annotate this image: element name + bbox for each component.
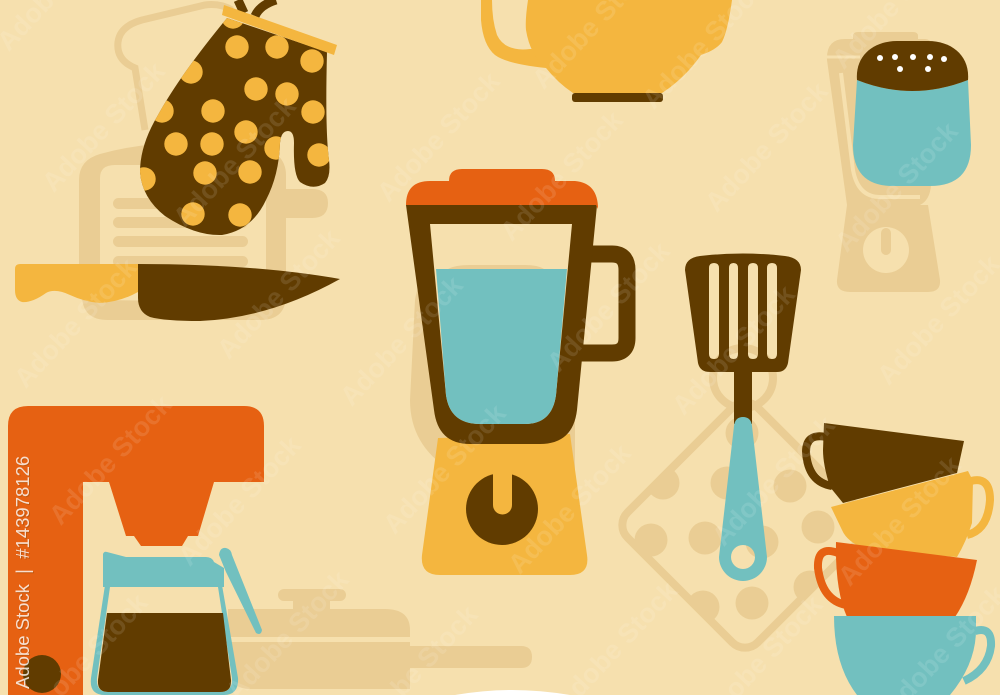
- coffee maker: [8, 406, 264, 695]
- ghost: pot holder: [615, 348, 875, 655]
- watermarks: Adobe Stock: [377, 398, 512, 539]
- coffee carafe: [91, 548, 262, 695]
- ghost: bread slice and toaster: [79, 5, 328, 320]
- watermarks: Adobe Stock: [494, 105, 629, 246]
- orange cup: [818, 542, 977, 617]
- knife: [15, 264, 340, 321]
- ghost: saucepan: [228, 589, 532, 689]
- vertical stock id text: Adobe Stock | #143978126: [12, 456, 33, 689]
- watermarks: Adobe Stock: [832, 450, 967, 591]
- ghost: blender behind salt shaker: [827, 32, 940, 292]
- watermarks: Adobe Stock: [699, 76, 834, 217]
- salt shaker: [853, 41, 971, 186]
- watermarks: Adobe Stock: [502, 438, 637, 579]
- ghost: blender behind main blender: [410, 265, 575, 470]
- watermarks: Adobe Stock: [43, 389, 178, 530]
- watermarks: Adobe Stock: [541, 236, 676, 377]
- watermarks: Adobe Stock: [167, 91, 302, 232]
- watermarks: Adobe Stock: [666, 279, 801, 420]
- watermarks: Adobe Stock: [829, 116, 964, 257]
- spatula: [685, 254, 801, 581]
- vertical stock id text: Adobe Stock | #143978126: [13, 457, 34, 690]
- white plate edge at bottom: [455, 690, 570, 695]
- watermarks: Adobe Stock: [334, 270, 469, 411]
- main blender: [406, 169, 627, 575]
- stacked cups: [806, 423, 991, 695]
- watermarks: Adobe Stock: [8, 252, 143, 393]
- brown cup: [806, 423, 964, 503]
- oven mitt: [132, 0, 337, 235]
- watermarks: Adobe Stock: [211, 223, 346, 364]
- yellow cup: [831, 471, 990, 557]
- watermarks: Adobe Stock: [172, 430, 307, 571]
- watermarks: Adobe Stock: [706, 410, 841, 551]
- teal cup: [834, 616, 991, 695]
- watermarks: Adobe Stock: [371, 66, 506, 207]
- watermarks: Adobe Stock: [36, 56, 171, 197]
- yellow cup top: [481, 0, 732, 102]
